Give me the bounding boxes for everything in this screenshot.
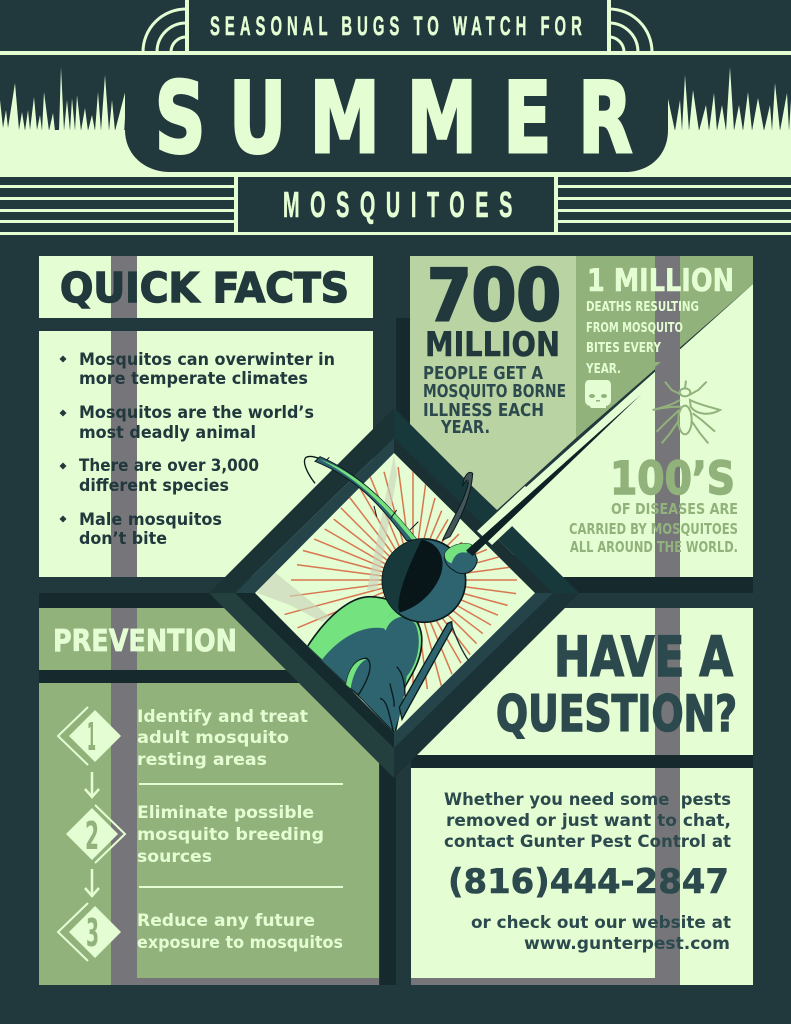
- panel: quick facts header: QUICK FACTS: [60, 264, 349, 312]
- title: summer: SUMMER: [155, 62, 632, 176]
- step 1: adult mosquito: [137, 728, 289, 748]
- stat: 100's: ALL AROUND THE WORLD.: [570, 538, 738, 556]
- step 2: mosquito breeding: [137, 825, 324, 845]
- step 2: [66, 803, 324, 867]
- body: [307, 597, 422, 733]
- right antenna: [443, 472, 473, 540]
- stat: 700 million: ILLNESS EACH: [423, 400, 544, 421]
- panel: prevention header background: [39, 608, 288, 670]
- left antenna: [304, 456, 418, 541]
- icon: skull: [585, 380, 611, 408]
- stat: 700 million: PEOPLE GET A: [423, 363, 543, 384]
- prevention heading: PREVENTION: [53, 624, 237, 659]
- step 3: 3: [86, 911, 99, 955]
- stat: 700 million: MOSQUITO BORNE: [423, 381, 566, 402]
- stat: 700 million: MILLION: [425, 325, 560, 365]
- contact intro: [444, 790, 731, 852]
- step 1: Identify and treat: [137, 707, 308, 727]
- cream diseases area: [477, 284, 753, 577]
- list text: most deadly animal: [79, 423, 256, 443]
- stat: 100's: 100’S: [610, 452, 735, 505]
- list text: different species: [79, 476, 229, 496]
- have a question heading: [496, 625, 737, 743]
- list text: more temperate climates: [79, 369, 308, 389]
- title pill: [125, 55, 668, 172]
- stat: 700 million: [423, 254, 566, 438]
- stat: 1 million: [585, 263, 734, 377]
- stat: 1 million: 1 MILLION: [587, 263, 734, 299]
- contact intro: contact Gunter Pest Control at: [444, 832, 731, 852]
- grass band: [0, 67, 791, 173]
- stat: 100's: CARRIED BY MOSQUITOES: [569, 520, 738, 538]
- contact intro: removed or just want to chat,: [446, 811, 731, 831]
- quick facts list: [60, 350, 335, 549]
- stat: 700 million: 700: [427, 254, 561, 337]
- contact text: [444, 790, 731, 954]
- prevention steps: [58, 707, 343, 961]
- contact intro: Whether you need some pests: [444, 790, 731, 810]
- stat: 1 million: FROM MOSQUITO: [586, 321, 683, 336]
- website: www.gunterpest.com: [524, 934, 730, 954]
- list text: Mosquitos can overwinter in: [79, 350, 335, 370]
- proboscis: [466, 394, 642, 556]
- stat: 100's: OF DISEASES ARE: [611, 500, 738, 518]
- kicker: SEASONAL BUGS TO WATCH FOR: [210, 10, 582, 41]
- diamond frame: [209, 408, 579, 778]
- panel: statistics: [410, 256, 753, 577]
- panel: have a question background: [417, 608, 753, 755]
- mid green 1 million area: [576, 256, 753, 438]
- icon: right arcs: [609, 9, 652, 52]
- website: [471, 913, 731, 954]
- icon: mosquito outline: [653, 381, 720, 443]
- step 3: exposure to mosquitos: [137, 933, 343, 953]
- front leg: [399, 622, 452, 719]
- step 2: Eliminate possible: [137, 803, 314, 823]
- stat: 1 million: BITES EVERY: [586, 341, 661, 356]
- website: or check out our website at: [471, 913, 731, 933]
- phone number: (816)444-2847: [448, 862, 729, 902]
- light green 700 million area: [410, 256, 576, 510]
- list text: [79, 350, 335, 549]
- stat: 700 million: YEAR.: [440, 417, 490, 438]
- panel: contact background: [411, 768, 753, 985]
- arrow 2: [85, 869, 99, 896]
- step 1: resting areas: [137, 750, 267, 770]
- snout: [445, 544, 477, 574]
- bullets: [60, 356, 66, 522]
- dark divider bars: [39, 318, 753, 985]
- wings: [257, 455, 397, 622]
- step 3: Reduce any future: [137, 911, 315, 931]
- step 3: [58, 903, 343, 961]
- step 1: [58, 707, 308, 770]
- sunburst rays: [285, 467, 517, 690]
- stat: 100's: [569, 452, 738, 556]
- list text: Mosquitos are the world’s: [79, 403, 314, 423]
- arrow 1: [85, 772, 99, 797]
- step 1: 1: [87, 715, 96, 759]
- step 2: sources: [137, 847, 212, 867]
- step dividers: [139, 783, 343, 888]
- list text: There are over 3,000: [79, 456, 259, 476]
- panel: quick facts list background: [39, 331, 373, 577]
- subtitle: mosquitoes: MOSQUITOES: [283, 186, 512, 226]
- have a question heading: HAVE A: [554, 625, 733, 689]
- head: [382, 539, 466, 622]
- step 2: 2: [85, 814, 99, 858]
- stat: 1 million: DEATHS RESULTING: [586, 300, 699, 315]
- stat: 1 million: YEAR.: [585, 362, 621, 377]
- list text: Male mosquitos: [79, 510, 222, 530]
- icon: left arcs: [143, 9, 186, 52]
- list text: don’t bite: [79, 529, 167, 549]
- header banner: [0, 0, 791, 235]
- illustration: mosquito in sunburst: [257, 394, 642, 733]
- panel: prevention steps background: [39, 683, 379, 985]
- header rules: [0, 0, 791, 235]
